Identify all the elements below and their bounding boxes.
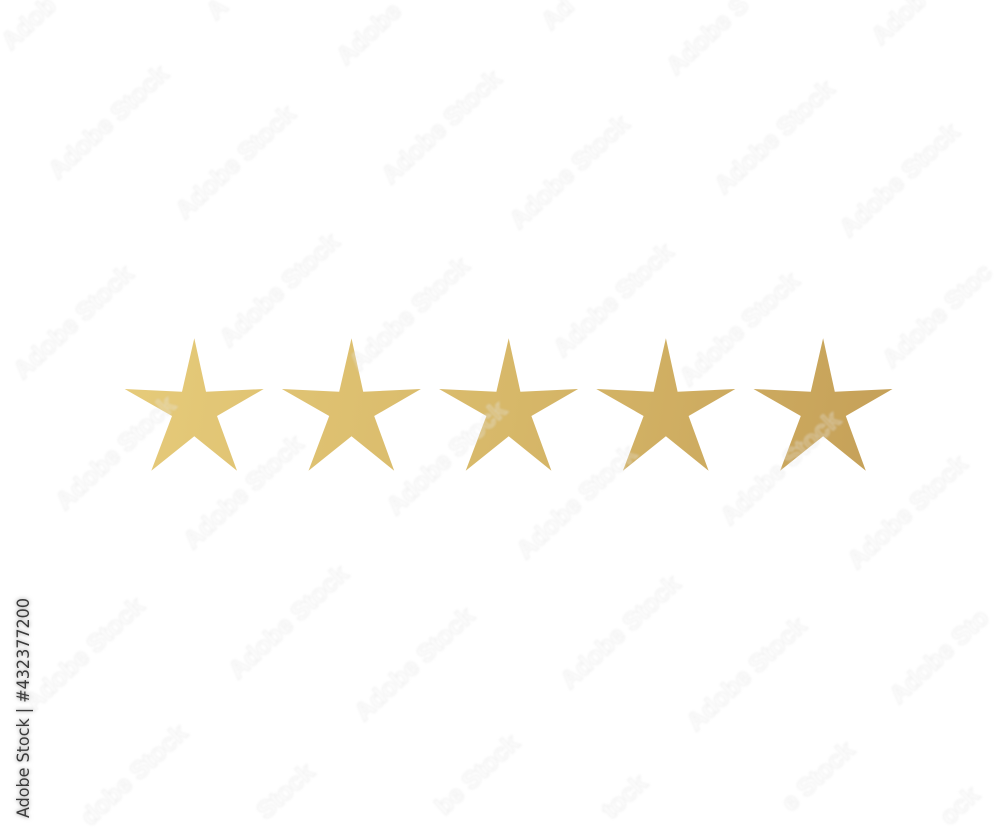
repeating diagonal watermark: Adobe Stock	[349, 602, 480, 726]
repeating diagonal watermark: Adobe Stock	[555, 570, 686, 694]
repeating diagonal watermark: Adobe Stoc	[877, 258, 998, 373]
repeating diagonal watermark: Adobe Stock	[214, 228, 345, 352]
repeating diagonal watermark: Adobe Stock	[674, 267, 805, 391]
repeating diagonal watermark: be Stock	[430, 729, 525, 820]
repeating diagonal watermark: dobe Stock	[75, 719, 193, 831]
row of five gold stars	[125, 338, 892, 471]
repeating diagonal watermark: Adobe Stock	[834, 118, 965, 242]
repeating diagonal watermark: Adobe Stock	[8, 260, 139, 384]
repeating diagonal watermark: Adobe Stock	[376, 65, 507, 189]
repeating diagonal watermark: Adobe Sto	[884, 604, 995, 709]
repeating diagonal watermark: Adobe Stock	[19, 592, 150, 716]
repeating diagonal watermark: Adobe Stock	[842, 450, 973, 574]
repeating diagonal watermark: Adobe Stock	[170, 100, 301, 224]
repeating diagonal watermark: Adobe Stock	[504, 110, 635, 234]
repeating diagonal watermark: Adobe Stock	[548, 238, 679, 362]
repeating diagonal watermark: Adobe Stock	[381, 396, 512, 520]
star 5	[754, 338, 892, 471]
repeating diagonal watermark: Adobe Stock	[43, 60, 174, 184]
repeating diagonal watermark: ock	[934, 781, 985, 831]
star 1	[125, 338, 264, 471]
star 4	[596, 338, 735, 471]
star 2	[282, 338, 421, 471]
vertical stock id label: Adobe Stock | #432377200	[14, 598, 34, 818]
repeating diagonal watermark: e Stock	[776, 736, 860, 817]
repeating diagonal watermark: Adobe Stock	[511, 440, 642, 564]
repeating diagonal watermark: Adobe Stock	[223, 560, 354, 684]
repeating diagonal watermark: Adobe Stock	[715, 406, 846, 530]
repeating diagonal watermark: Stock	[251, 758, 320, 825]
star 3	[439, 338, 578, 471]
repeating diagonal watermark: Adobe Stock	[178, 430, 309, 554]
repeating diagonal watermark: Adobe Stock	[709, 75, 840, 199]
repeating diagonal watermark: Adobe Stock	[344, 252, 475, 376]
repeating diagonal watermark: tock	[596, 769, 653, 824]
repeating diagonal watermark: Adobe Stock	[681, 612, 812, 736]
repeating diagonal watermark: Adobe Stock	[50, 391, 181, 515]
